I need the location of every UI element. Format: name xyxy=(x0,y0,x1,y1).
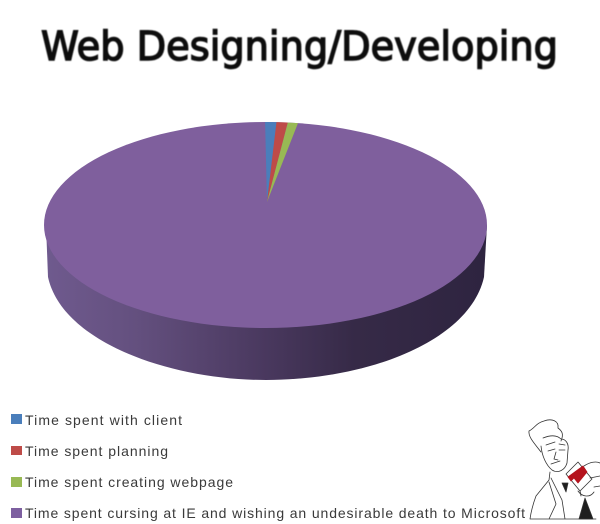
lower tie xyxy=(579,498,593,519)
slice: time creating webpage xyxy=(267,122,298,202)
hair xyxy=(529,420,562,452)
face xyxy=(541,436,568,472)
small tie knot xyxy=(562,483,568,492)
brows and eyes xyxy=(546,442,565,464)
pie chart xyxy=(44,118,487,380)
title: Web Designing/Developing xyxy=(41,24,558,70)
hand xyxy=(578,462,600,496)
legend item: client: Time spent with client xyxy=(25,412,182,428)
slice: time with client xyxy=(265,118,277,202)
pie top face xyxy=(44,122,487,328)
legend item: planning: Time spent planning xyxy=(25,443,168,459)
mug xyxy=(566,462,592,491)
collar and jacket xyxy=(530,472,596,519)
legend item: cursing: Time spent cursing at IE and wishing an undesirable death to Microsoft xyxy=(25,505,525,521)
legend item: webpage: Time spent creating webpage xyxy=(25,474,233,490)
pie side wall xyxy=(46,225,487,380)
pie slices xyxy=(265,122,298,202)
legend xyxy=(11,412,525,521)
slice: time planning xyxy=(267,118,289,202)
icon: man with mug meme xyxy=(529,420,600,519)
